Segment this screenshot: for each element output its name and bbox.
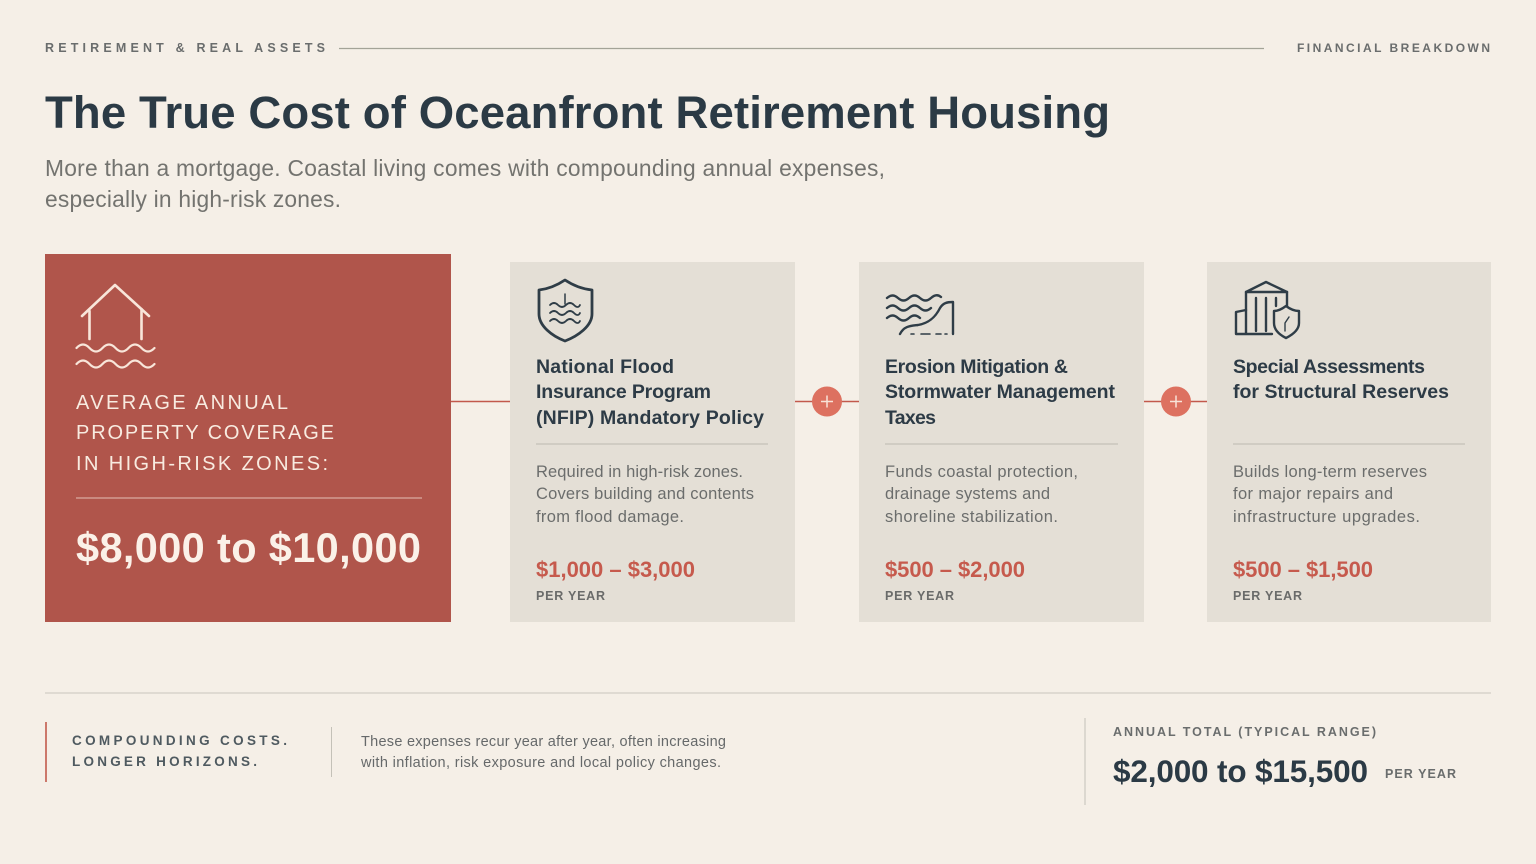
- per year label: PER YEAR: [1233, 589, 1302, 603]
- header: eyebrow row: RETIREMENT & REAL ASSETS: [45, 41, 325, 55]
- card heading: Stormwater Management: [885, 381, 1116, 403]
- panel: special assessments: [1207, 262, 1491, 622]
- card description: Funds coastal protection,: [885, 463, 1078, 481]
- card heading: Special Assessments: [1233, 356, 1425, 378]
- card description: drainage systems and: [885, 485, 1050, 503]
- per year label: PER YEAR: [536, 589, 605, 603]
- footer: compounding costs callout: LONGER HORIZONS.: [72, 754, 257, 769]
- footer: annual total: $2,000 to $15,500: [1113, 753, 1368, 789]
- card description: Required in high-risk zones.: [536, 463, 743, 481]
- card description: Builds long-term reserves: [1233, 463, 1427, 481]
- footer: explanation text: with inflation, risk exposure and local policy changes.: [360, 755, 721, 771]
- icon: shield with water: [539, 280, 592, 341]
- card heading: [885, 356, 1116, 429]
- card heading: Taxes: [885, 407, 936, 429]
- footer: annual total: [1113, 725, 1456, 789]
- panel: average annual property coverage: [45, 254, 451, 622]
- header: eyebrow row: [45, 41, 1490, 55]
- card heading: Erosion Mitigation &: [885, 356, 1068, 378]
- panel heading: [76, 392, 334, 475]
- footer: explanation text: These expenses recur year after year, often increasing: [361, 734, 726, 750]
- card price: $500 – $1,500: [1233, 557, 1373, 582]
- header: eyebrow row: FINANCIAL BREAKDOWN: [1297, 41, 1490, 55]
- card description: [885, 463, 1078, 526]
- icon: building with shield: [1236, 282, 1299, 338]
- per year label: PER YEAR: [885, 589, 954, 603]
- footer: annual total: PER YEAR: [1385, 767, 1456, 781]
- card heading: Insurance Program: [536, 381, 711, 403]
- card description: from flood damage.: [536, 508, 684, 526]
- footer: compounding costs callout: COMPOUNDING COSTS.: [72, 733, 287, 748]
- card description: infrastructure upgrades.: [1233, 508, 1420, 526]
- card heading: (NFIP) Mandatory Policy: [536, 407, 764, 429]
- icon: waves and eroding shore: [887, 295, 953, 334]
- panel: erosion mitigation: [859, 262, 1144, 622]
- card heading: [536, 356, 764, 429]
- card price: $500 – $2,000: [885, 557, 1025, 582]
- card heading: for Structural Reserves: [1233, 381, 1449, 403]
- panel heading: IN HIGH-RISK ZONES:: [76, 453, 328, 475]
- card price: $1,000 – $3,000: [536, 557, 695, 582]
- footer: compounding costs callout: [46, 722, 287, 782]
- card description: Covers building and contents: [536, 485, 754, 503]
- card description: shoreline stabilization.: [885, 508, 1058, 526]
- subtitle: especially in high-risk zones.: [45, 186, 341, 212]
- subtitle: [45, 155, 885, 212]
- panel total value: $8,000 to $10,000: [76, 524, 421, 571]
- connector lines: [451, 400, 1208, 402]
- title: The True Cost of Oceanfront Retirement Housing: [45, 87, 1110, 138]
- card description: for major repairs and: [1233, 485, 1393, 503]
- card description: [536, 463, 754, 526]
- icon: house over water: [76, 285, 154, 368]
- card heading: [1233, 356, 1449, 403]
- card description: [1233, 463, 1427, 526]
- subtitle: More than a mortgage. Coastal living comes with compounding annual expenses,: [45, 155, 885, 181]
- panel heading: PROPERTY COVERAGE: [76, 422, 334, 444]
- footer: explanation text: [360, 734, 726, 771]
- panel heading: AVERAGE ANNUAL: [76, 392, 288, 414]
- panel: NFIP: [510, 262, 795, 622]
- plus connector 2: [1161, 386, 1191, 416]
- card heading: National Flood: [536, 356, 674, 378]
- footer: annual total: ANNUAL TOTAL (TYPICAL RANGE): [1113, 725, 1376, 739]
- plus connector 1: [812, 386, 842, 416]
